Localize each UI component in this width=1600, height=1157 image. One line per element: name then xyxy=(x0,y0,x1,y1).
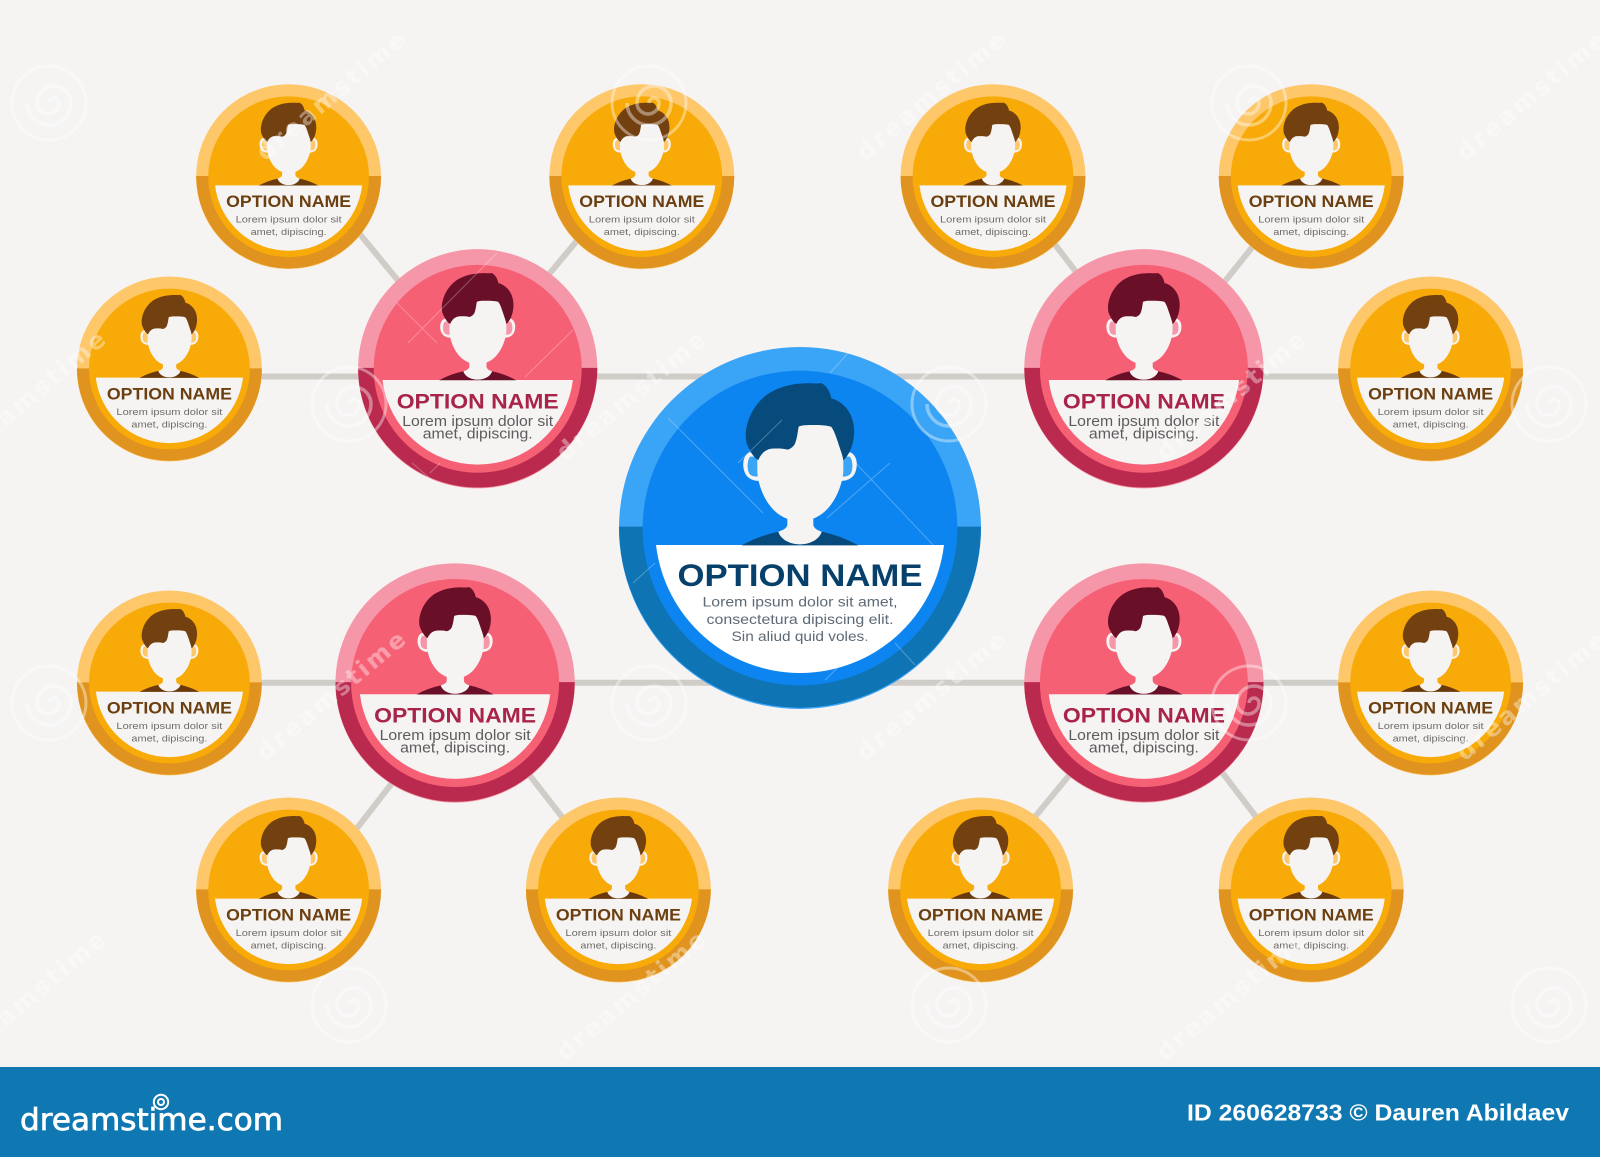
pink node: top left xyxy=(358,249,597,488)
orange node 1: amet, dipiscing. xyxy=(251,227,327,238)
watermark overlay: dreamstime xyxy=(851,25,1011,166)
orange node 7: Lorem ipsum dolor sit xyxy=(116,721,223,732)
pink node: bottom right xyxy=(1024,563,1264,803)
central heading: OPTION NAME xyxy=(678,557,922,593)
orange node 8: Lorem ipsum dolor sit xyxy=(236,928,342,939)
orange node 6: OPTION NAME xyxy=(1368,385,1493,403)
orange node 10: amet, dipiscing. xyxy=(943,940,1019,951)
orange node 7 xyxy=(77,591,262,775)
pink node: top left: amet, dipiscing. xyxy=(423,426,533,442)
orange node 12: OPTION NAME xyxy=(1368,699,1493,717)
orange node 5 xyxy=(1219,84,1404,269)
pink node: bottom right: Lorem ipsum dolor sit xyxy=(1068,728,1219,744)
pink node: top right: amet, dipiscing. xyxy=(1089,426,1199,442)
pink node: top right: OPTION NAME xyxy=(1063,390,1225,413)
orange node 12: amet, dipiscing. xyxy=(1393,733,1469,744)
central description xyxy=(702,594,898,644)
watermark overlay: dreamstime xyxy=(1151,925,1311,1066)
footer logo text: dreamstime.com xyxy=(20,1103,283,1138)
watermark overlay: dreamstime xyxy=(551,325,711,466)
orange node 11: Lorem ipsum dolor sit xyxy=(1258,928,1365,939)
orange node 8: OPTION NAME xyxy=(226,906,351,924)
orange node 2: OPTION NAME xyxy=(579,193,704,211)
pink node: top right xyxy=(1024,249,1264,488)
orange node 9 xyxy=(526,798,711,982)
orange node 1: Lorem ipsum dolor sit xyxy=(236,215,342,226)
central node xyxy=(619,347,981,709)
orange node 5: amet, dipiscing. xyxy=(1273,227,1349,238)
pink node: bottom right: amet, dipiscing. xyxy=(1089,740,1199,756)
orange node 11: OPTION NAME xyxy=(1249,906,1374,924)
orange node 2: Lorem ipsum dolor sit xyxy=(589,215,695,226)
footer bar xyxy=(0,1067,1600,1157)
central description: consectetura dipiscing elit. xyxy=(706,611,894,627)
orange node 4: Lorem ipsum dolor sit xyxy=(940,215,1046,226)
orange node 8: amet, dipiscing. xyxy=(251,940,327,951)
orange node 7: amet, dipiscing. xyxy=(131,733,207,744)
watermark overlay: dreamstime xyxy=(851,625,1011,766)
orange node 4: OPTION NAME xyxy=(930,193,1056,211)
orange node 7: OPTION NAME xyxy=(107,699,232,717)
orange node 9: Lorem ipsum dolor sit xyxy=(565,928,672,939)
pink node: bottom left: amet, dipiscing. xyxy=(400,740,510,756)
pink node: bottom left: OPTION NAME xyxy=(374,704,536,728)
orange node 3: amet, dipiscing. xyxy=(131,419,207,430)
orange node 6: Lorem ipsum dolor sit xyxy=(1378,407,1484,418)
orange node 6: amet, dipiscing. xyxy=(1393,419,1469,430)
orange node 10: Lorem ipsum dolor sit xyxy=(928,928,1034,939)
orange node 3: OPTION NAME xyxy=(107,385,232,403)
pink node: top left: Lorem ipsum dolor sit xyxy=(402,414,553,430)
orange node 1 xyxy=(196,84,381,269)
central description: Sin aliud quid voles. xyxy=(732,628,868,644)
orange node 5: Lorem ipsum dolor sit xyxy=(1258,215,1365,226)
orange node 5: OPTION NAME xyxy=(1249,193,1374,211)
orange node 11: amet, dipiscing. xyxy=(1273,940,1349,951)
orange node 4 xyxy=(901,84,1085,269)
pink node: top left: OPTION NAME xyxy=(397,390,559,413)
orange node 3: Lorem ipsum dolor sit xyxy=(116,407,223,418)
orange node 12: Lorem ipsum dolor sit xyxy=(1378,721,1484,732)
pink node: bottom right: OPTION NAME xyxy=(1063,704,1225,728)
orange node 11 xyxy=(1219,798,1404,982)
footer logo spiral xyxy=(154,1095,168,1109)
central avatar xyxy=(619,347,981,709)
orange node 8 xyxy=(196,798,381,982)
central description: Lorem ipsum dolor sit amet, xyxy=(702,594,898,610)
pink node: top right: Lorem ipsum dolor sit xyxy=(1068,414,1219,430)
orange node 10: OPTION NAME xyxy=(918,906,1043,924)
orange node 6 xyxy=(1338,277,1523,461)
orange node 1: OPTION NAME xyxy=(226,193,351,211)
pink node: bottom left: Lorem ipsum dolor sit xyxy=(380,728,531,744)
watermark overlay: dreamstime xyxy=(1151,325,1311,466)
orange node 4: amet, dipiscing. xyxy=(955,227,1031,238)
pink node: bottom left xyxy=(335,563,575,803)
orange node 2 xyxy=(549,84,734,269)
orange node 9: amet, dipiscing. xyxy=(580,940,656,951)
orange node 2: amet, dipiscing. xyxy=(604,227,680,238)
watermark overlay: dreamstime xyxy=(251,25,411,166)
orange node 10 xyxy=(888,798,1073,982)
watermark overlay: dreamstime xyxy=(251,625,411,766)
footer credit: ID 260628733 © Dauren Abildaev xyxy=(1187,1100,1569,1126)
watermark overlay: dreamstime xyxy=(551,925,711,1066)
orange node 9: OPTION NAME xyxy=(556,906,681,924)
orange node 3 xyxy=(77,277,262,461)
connector lines xyxy=(240,210,1360,850)
orange node 12 xyxy=(1338,591,1523,775)
